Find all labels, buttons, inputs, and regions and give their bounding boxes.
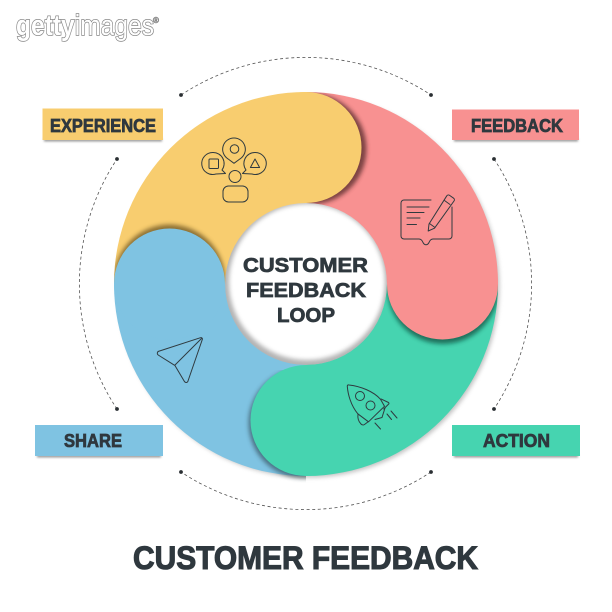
lobe: action green [250,365,362,476]
hub text: FEEDBACK [246,279,366,302]
dashed connector arcs [79,57,532,510]
lobe: feedback red [387,228,498,340]
hub text: LOOP [277,304,335,327]
label: feedback: FEEDBACK [471,116,563,136]
watermark logo: ® [153,16,159,25]
outer drop shadow [118,96,500,478]
watermark logo: gettyimages [16,10,154,42]
lobe shadows [114,94,498,478]
icon: people with speech bubbles [202,138,266,202]
label: action: ACTION [483,431,550,451]
lobe: experience yellow [250,92,362,203]
central white hub [225,203,387,365]
circular loop diagram [114,92,500,478]
icon: rocket [347,385,397,429]
label: action [452,425,580,458]
label: share: SHARE [64,431,122,451]
icon: note and pencil [401,195,454,245]
label: experience: EXPERIENCE [50,116,156,136]
icon: paper plane [157,338,202,383]
hub text [243,254,368,327]
lobe: share blue [114,228,225,340]
label: feedback [452,110,579,142]
label: share [35,425,163,458]
segment: quadrant colours [114,92,498,476]
hub text: CUSTOMER [243,254,368,277]
label: experience [42,108,163,142]
title: CUSTOMER FEEDBACK [133,540,478,576]
